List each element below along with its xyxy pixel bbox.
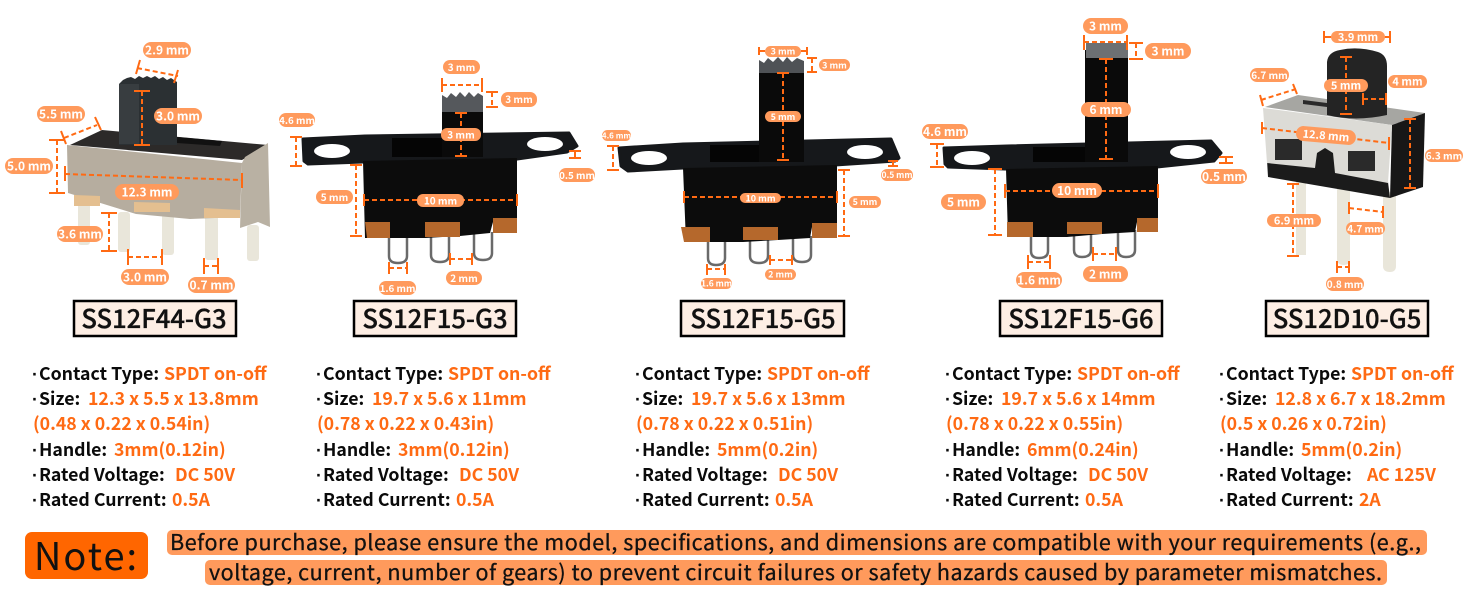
specifications: SS12F15-G3: SPDT on-off (448, 360, 552, 386)
specifications: SS12D10-G5: · (1219, 490, 1225, 510)
dimension: 0.8 mm (1326, 261, 1364, 291)
dimension: 3 mm width (1083, 18, 1128, 50)
specifications: SS12F15-G3: 19.7 x 5.6 x 11mm (372, 385, 527, 411)
dimension: 6.3 mm (1404, 119, 1463, 188)
dimension: 12.3 mm (65, 166, 242, 200)
dimension: 5.5 mm (37, 106, 101, 144)
dimension: 4.6 mm (602, 130, 631, 170)
dimension: 12.8 mm: 12.8 mm (1302, 125, 1350, 146)
dimension: 3 mm width (759, 44, 807, 58)
dimension: 3.0 mm pitch: 3.0 mm (123, 268, 167, 286)
dimension: 3.9 mm: 3.9 mm (1338, 29, 1378, 45)
specifications: SS12F15-G6: · (945, 364, 951, 384)
dimension: 6.9 mm: 6.9 mm (1274, 212, 1314, 228)
specifications: SS12F15-G6: · (945, 490, 951, 510)
dimension: 4.6 mm: 4.6 mm (279, 113, 315, 127)
dimension: 6.7 mm (1250, 67, 1297, 106)
specifications: SS12F15-G3: · (316, 389, 322, 409)
specifications: SS12F15-G3: Contact Type: (323, 360, 443, 386)
dimension: 10 mm: 10 mm (1057, 182, 1097, 199)
specifications: SS12F15-G5: 0.5A (775, 486, 814, 512)
specifications: SS12F15-G6: · (945, 440, 951, 460)
dimension: 4.7 mm: 4.7 mm (1347, 220, 1384, 235)
specifications: SS12F44-G3: Size: (39, 385, 80, 411)
specifications: SS12F15-G5: (0.78 x 0.22 x 0.51in) (636, 410, 813, 436)
specifications: SS12F44-G3: Rated Voltage: (39, 461, 165, 487)
specifications: SS12F44-G3: · (32, 440, 38, 460)
specifications: SS12F44-G3: 0.5A (172, 486, 211, 512)
specifications: SS12F15-G3: Size: (323, 385, 364, 411)
dimension: 5.0 mm: 5.0 mm (7, 158, 51, 174)
dimension: 10 mm (364, 192, 517, 207)
specifications: SS12F15-G3: · (316, 440, 322, 460)
dimension: 2 mm (765, 255, 796, 280)
dimension: 1.6 mm (701, 264, 732, 290)
dimension: 1.6 mm: 1.6 mm (380, 281, 415, 295)
specifications: SS12D10-G5: Rated Voltage: (1226, 461, 1352, 487)
dimension: 12.3 mm: 12.3 mm (121, 184, 173, 200)
specifications: SS12F44-G3: SPDT on-off (164, 360, 268, 386)
dimension: 1.6 mm (379, 262, 416, 295)
dimension: 6.3 mm: 6.3 mm (1426, 147, 1462, 162)
dimension: 4.6 mm (922, 123, 968, 167)
specifications: SS12F15-G3: (0.78 x 0.22 x 0.43in) (317, 410, 494, 436)
specifications: SS12F15-G5: · (635, 465, 641, 485)
specifications: SS12F15-G5: Rated Voltage: (642, 461, 768, 487)
note text (167, 526, 1427, 587)
specifications: SS12D10-G5: 2A (1359, 486, 1381, 512)
specifications: SS12D10-G5: SPDT on-off (1351, 360, 1455, 386)
specifications: SS12F15-G5: · (635, 440, 641, 460)
specifications: SS12F15-G3: Rated Current: (323, 486, 451, 512)
specifications: SS12F44-G3: Handle: (39, 436, 107, 462)
specifications: SS12D10-G5: 12.8 x 6.7 x 18.2mm (1275, 385, 1446, 411)
specifications: SS12F15-G6: 19.7 x 5.6 x 14mm (1001, 385, 1156, 411)
dimension: 3 mm width: 3 mm (448, 59, 475, 74)
dimension: 10 mm (1005, 182, 1158, 199)
dimension: 0.5 mm: 0.5 mm (881, 169, 913, 181)
specifications: SS12D10-G5: Contact Type: (1226, 360, 1346, 386)
specifications: SS12F44-G3: DC 50V (175, 461, 236, 487)
dimension: 5.5 mm: 5.5 mm (39, 106, 83, 122)
dimension: 5 mm: 5 mm (853, 195, 877, 208)
photo: SS12D10-G5 switch (1263, 48, 1425, 272)
specifications: SS12F15-G5: 19.7 x 5.6 x 13mm (691, 385, 846, 411)
specifications: SS12F15-G5: Size: (642, 385, 683, 411)
dimension: 4 mm: 4 mm (1392, 74, 1423, 90)
panel: SS12F44-G3 (5, 42, 270, 512)
specifications: SS12D10-G5: · (1219, 389, 1225, 409)
specifications: SS12F15-G5: Rated Current: (642, 486, 770, 512)
dimension: 4.7 mm (1346, 202, 1385, 235)
specifications: SS12D10-G5: (0.5 x 0.26 x 0.72in) (1220, 410, 1387, 436)
dimension: 5 mm: 5 mm (321, 189, 348, 204)
dimension: 5 mm: 5 mm (947, 194, 980, 210)
dimension: 5 mm (838, 170, 881, 236)
specifications: SS12F15-G6: Size: (952, 385, 993, 411)
photo: SS12F15-G6 switch (944, 43, 1221, 258)
dimension: 0.5 mm: 0.5 mm (1202, 168, 1246, 185)
specifications: SS12F15-G5: · (635, 490, 641, 510)
dimension: 4.6 mm (279, 113, 315, 166)
dimension: 3 mm top (807, 58, 850, 72)
specifications: SS12D10-G5: 5mm(0.2in) (1301, 436, 1402, 462)
dimension: 3 mm width: 3 mm (771, 44, 795, 58)
dimension: 0.5 mm: 0.5 mm (559, 168, 595, 182)
dimension: 3.0 mm pitch (121, 249, 169, 286)
specifications: SS12D10-G5: · (1219, 364, 1225, 384)
specifications: SS12F15-G5: · (635, 389, 641, 409)
dimension: 3 mm width (442, 59, 482, 92)
specifications: SS12F15-G5: 5mm(0.2in) (717, 436, 818, 462)
dimension: 3.0 mm handle: 3.0 mm (156, 108, 200, 124)
dimension: 6 mm handle (1081, 59, 1131, 159)
model label: SS12F15-G3: SS12F15-G3 (362, 299, 508, 336)
dimension: 3 mm top (486, 91, 537, 107)
specifications: SS12F15-G5: Contact Type: (642, 360, 762, 386)
specifications: SS12F15-G3: Rated Voltage: (323, 461, 449, 487)
dimension: 5 mm handle (1324, 57, 1368, 114)
note text: voltage, current, number of gears) to prevent circuit failures or safety hazards caused by parameter mismatches. (209, 556, 1382, 587)
dimension: 3 mm top: 3 mm (505, 91, 533, 106)
specifications: SS12F44-G3: 3mm(0.12in) (114, 436, 226, 462)
specifications: SS12F15-G6: · (945, 389, 951, 409)
specifications: SS12D10-G5: Handle: (1226, 436, 1294, 462)
dimension: 5 mm (316, 165, 362, 236)
dimension: 3.6 mm: 3.6 mm (58, 226, 102, 242)
panel: SS12F15-G3 (279, 59, 595, 512)
dimension: 2 mm (446, 253, 482, 285)
dimension: 0.8 mm: 0.8 mm (1327, 276, 1363, 291)
model label: SS12F15-G6: SS12F15-G6 (1008, 299, 1154, 336)
note text: Before purchase, please ensure the model, specifications, and dimensions are compatible with your requirements (e.g., (170, 526, 1421, 557)
model label: SS12F44-G3: SS12F44-G3 (81, 299, 227, 336)
model label: SS12D10-G5: SS12D10-G5 (1273, 299, 1421, 336)
panel: SS12F15-G5 (602, 44, 913, 512)
specifications: SS12D10-G5: Size: (1226, 385, 1267, 411)
specifications: SS12F15-G3: · (316, 465, 322, 485)
specifications: SS12F15-G5: SPDT on-off (767, 360, 871, 386)
specifications: SS12F15-G6: · (945, 465, 951, 485)
dimension: 6 mm handle: 6 mm (1090, 101, 1122, 118)
dimension: 3 mm handle: 3 mm (447, 126, 475, 141)
dimension: 3.0 mm handle (134, 91, 202, 145)
dimension: 2 mm: 2 mm (450, 270, 478, 285)
photo: SS12F15-G3 switch (303, 92, 577, 263)
specifications: SS12F44-G3: · (32, 465, 38, 485)
dimension: 5.0 mm (5, 140, 65, 193)
dimension: 4 mm (1363, 74, 1427, 105)
specifications: SS12F44-G3: · (32, 364, 38, 384)
dimension: 0.7 mm: 0.7 mm (190, 276, 233, 294)
dimension: 10 mm: 10 mm (745, 192, 776, 204)
specifications: SS12F15-G5: · (635, 364, 641, 384)
specifications: SS12F15-G6: (0.78 x 0.22 x 0.55in) (946, 410, 1123, 436)
dimension: 6.7 mm: 6.7 mm (1251, 67, 1288, 82)
dimension: 0.5 mm (559, 151, 595, 182)
dimension: 10 mm: 10 mm (424, 192, 457, 207)
dimension: 3.9 mm (1324, 29, 1390, 45)
dimension: 3 mm top: 3 mm (1152, 42, 1184, 60)
specifications: SS12D10-G5: AC 125V (1366, 461, 1437, 487)
dimension: 0.5 mm (1201, 157, 1247, 185)
dimension: 2.9 mm: 2.9 mm (145, 42, 189, 58)
dimension: 5 mm handle: 5 mm (771, 110, 795, 123)
specifications: SS12F44-G3: · (32, 490, 38, 510)
specifications: SS12F44-G3: · (32, 389, 38, 409)
panel: SS12D10-G5 (1219, 29, 1463, 512)
dimension: 3 mm handle (441, 113, 481, 156)
dimension: 5 mm handle: 5 mm (1331, 78, 1361, 94)
specifications: SS12F15-G6: Handle: (952, 436, 1020, 462)
specifications: SS12F44-G3: (0.48 x 0.22 x 0.54in) (33, 410, 210, 436)
dimension: 12.8 mm (1262, 122, 1389, 150)
specifications: SS12F15-G6: DC 50V (1088, 461, 1149, 487)
dimension: 1.6 mm: 1.6 mm (1017, 272, 1061, 288)
dimension: 2 mm: 2 mm (768, 268, 793, 280)
dimension: 1.6 mm (1016, 255, 1062, 288)
specifications: SS12D10-G5: · (1219, 465, 1225, 485)
dimension: 3.6 mm (57, 213, 117, 251)
dimension: 2 mm: 2 mm (1089, 266, 1122, 282)
dimension: 2.9 mm (136, 42, 191, 83)
note badge: Note: (34, 526, 139, 581)
specifications: SS12F15-G3: 3mm(0.12in) (398, 436, 510, 462)
photo: SS12F44-G3 switch (67, 76, 270, 261)
specifications: SS12F15-G6: Contact Type: (952, 360, 1072, 386)
specifications: SS12F15-G3: 0.5A (456, 486, 495, 512)
dimension: 1.6 mm: 1.6 mm (701, 278, 732, 290)
dimension: 3 mm top: 3 mm (822, 58, 847, 72)
specifications: SS12F15-G6: Rated Voltage: (952, 461, 1078, 487)
model label: SS12F15-G5: SS12F15-G5 (690, 299, 836, 336)
dimension: 5 mm (941, 169, 1002, 235)
dimension: 10 mm (684, 191, 837, 204)
specifications: SS12F15-G3: · (316, 364, 322, 384)
dimension: 0.5 mm (881, 161, 913, 181)
specifications: SS12D10-G5: · (1219, 440, 1225, 460)
specifications: SS12F15-G6: 0.5A (1085, 486, 1124, 512)
panel: SS12F15-G6 (922, 18, 1247, 512)
photo: SS12F15-G5 switch (619, 57, 899, 265)
specifications: SS12F15-G5: DC 50V (778, 461, 839, 487)
dimension: 4.6 mm: 4.6 mm (602, 130, 631, 142)
specifications: SS12F15-G3: DC 50V (459, 461, 520, 487)
dimension: 5 mm handle (765, 73, 801, 160)
specifications: SS12F44-G3: Rated Current: (39, 486, 167, 512)
specifications: SS12F15-G3: · (316, 490, 322, 510)
specifications: SS12F15-G6: Rated Current: (952, 486, 1080, 512)
specifications: SS12F15-G6: SPDT on-off (1077, 360, 1181, 386)
specifications: SS12F44-G3: 12.3 x 5.5 x 13.8mm (88, 385, 259, 411)
dimension: 3 mm width: 3 mm (1089, 18, 1122, 34)
dimension: 4.6 mm: 4.6 mm (923, 123, 967, 140)
specifications: SS12F44-G3: Contact Type: (39, 360, 159, 386)
dimension: 0.7 mm (188, 258, 235, 294)
dimension: 6.9 mm (1267, 184, 1321, 256)
specifications: SS12D10-G5: Rated Current: (1226, 486, 1354, 512)
dimension: 2 mm (1083, 247, 1128, 282)
specifications: SS12F15-G3: Handle: (323, 436, 391, 462)
specifications: SS12F15-G5: Handle: (642, 436, 710, 462)
specifications: SS12F15-G6: 6mm(0.24in) (1027, 436, 1139, 462)
dimension: 3 mm top (1129, 42, 1191, 60)
